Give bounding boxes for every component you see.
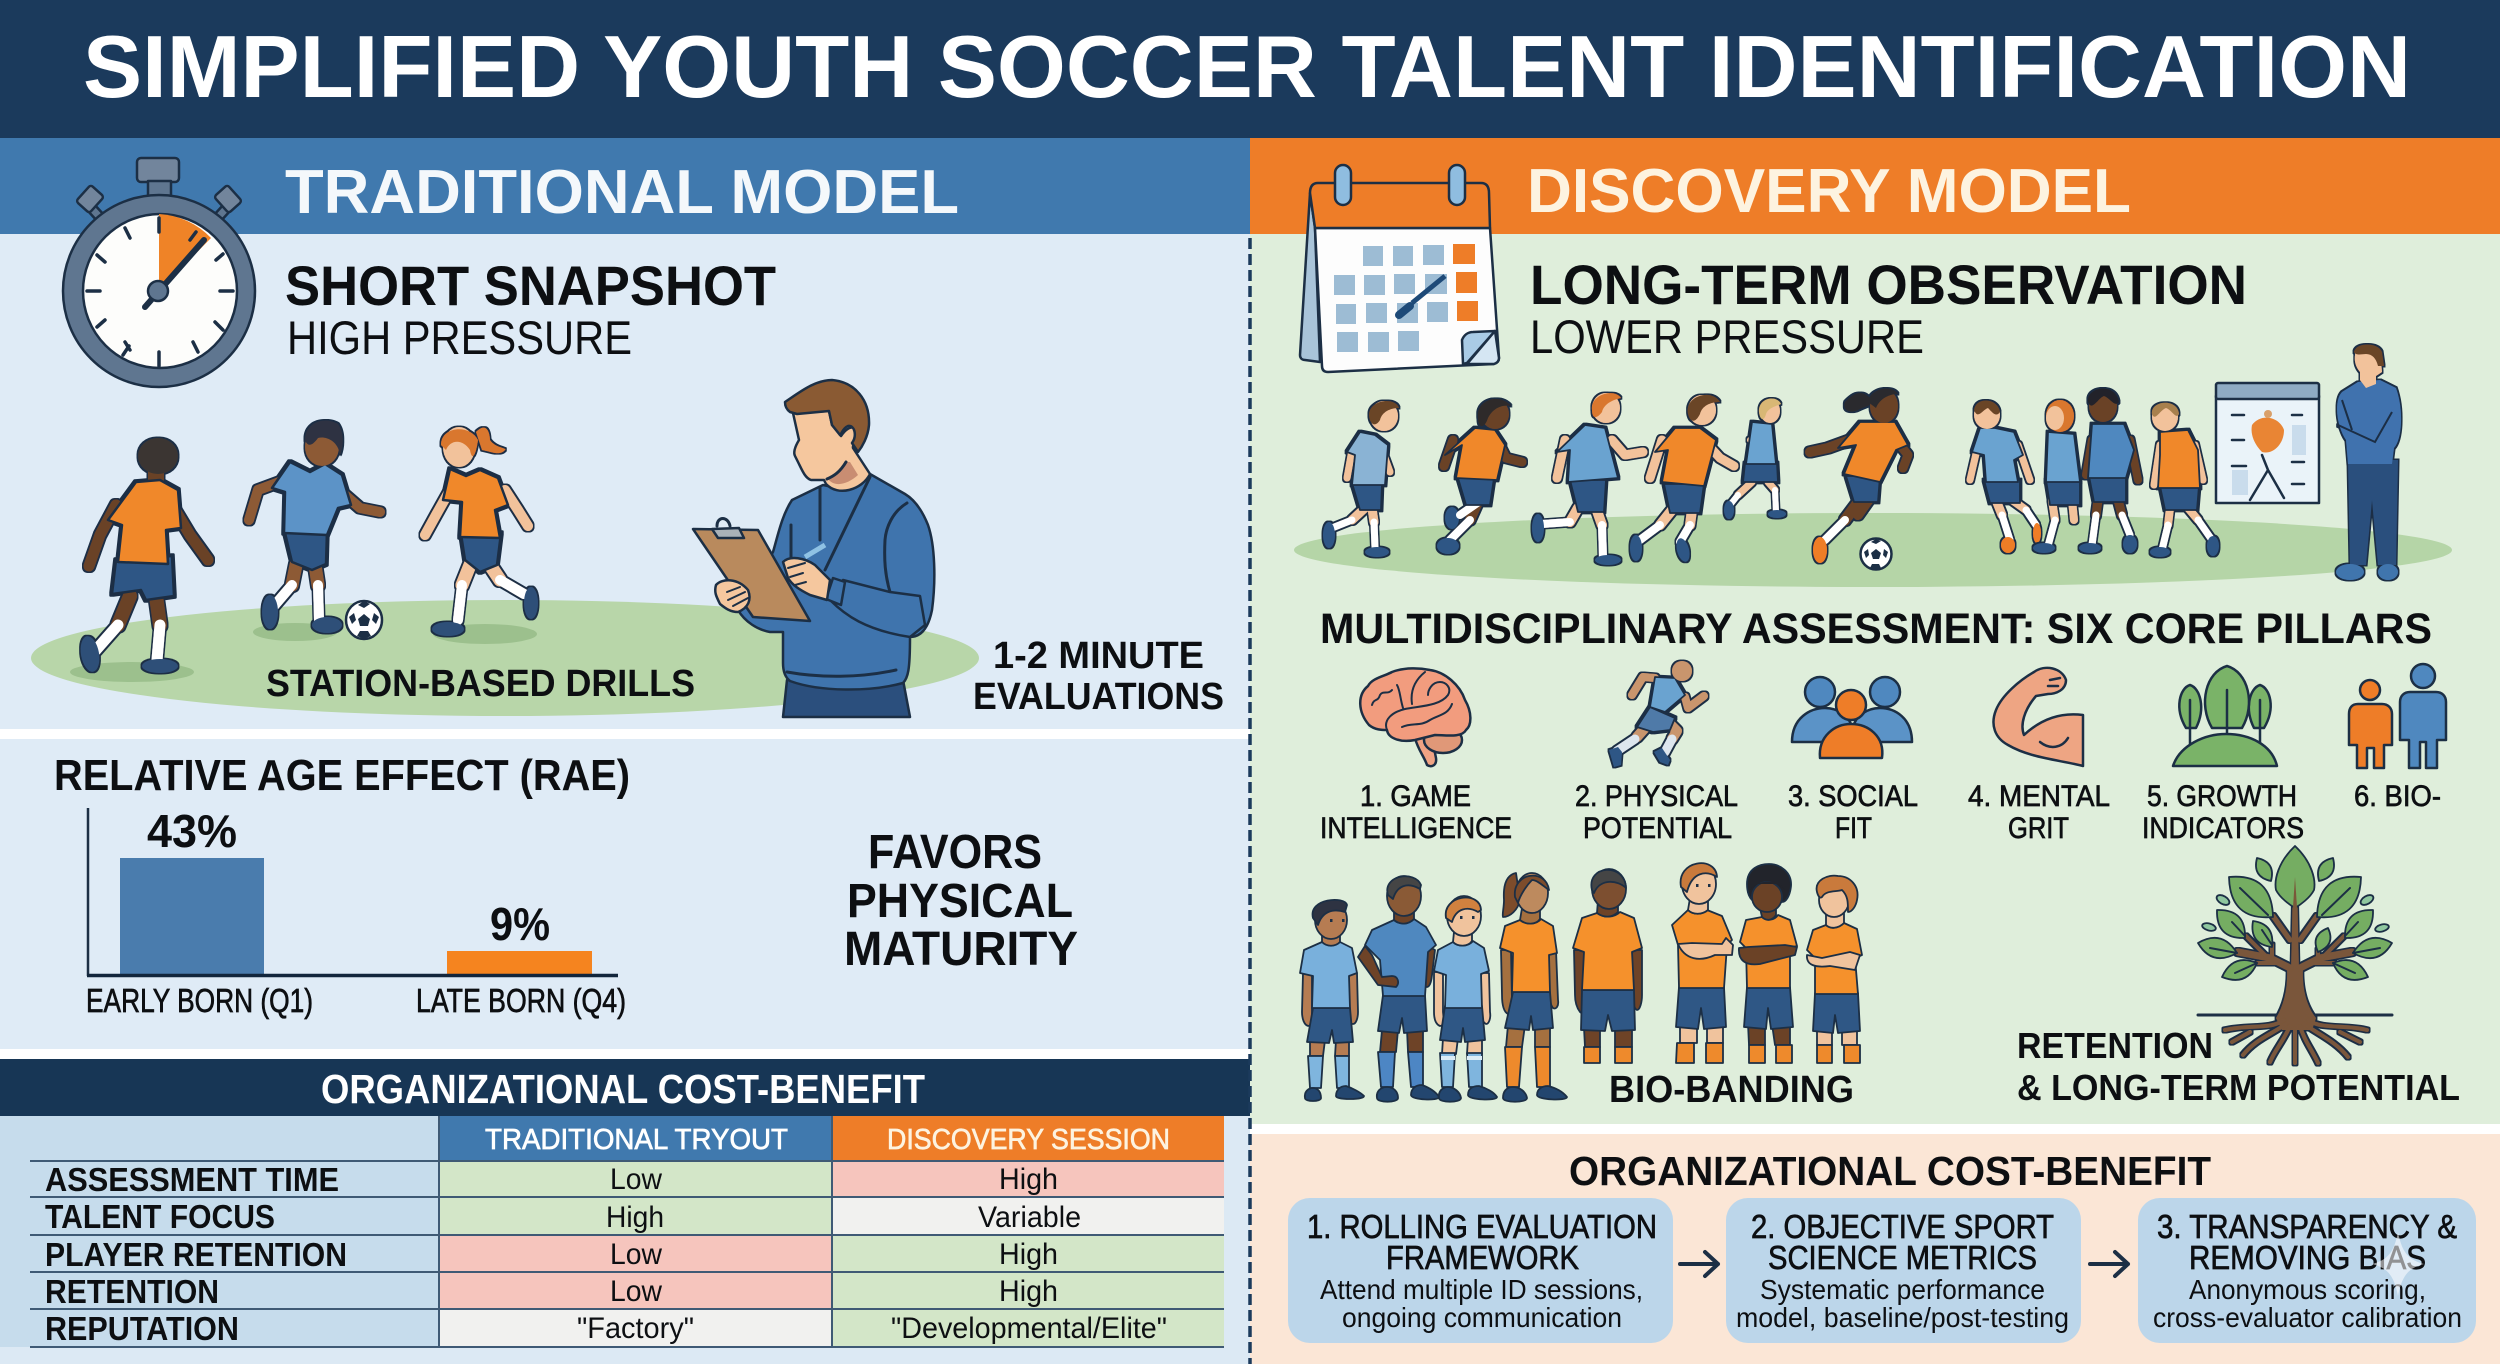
pillar 5: growth indicators: 5. GROWTH: [2147, 780, 2297, 813]
bar chart: early vs late born: 43%: [147, 805, 237, 857]
panel: discovery cost-benefit process: [1250, 1134, 2500, 1364]
caption: retention and long-term potential: RETENTION: [2017, 1025, 2213, 1066]
step card 3: transparency and removing bias: Anonymous scoring,: [2189, 1274, 2426, 1305]
table row labels: TALENT FOCUS: [45, 1198, 275, 1235]
table values: Low: [610, 1275, 662, 1308]
player 10: [2150, 403, 2219, 557]
step card 3: transparency and removing bias: cross-evaluator calibration: [2153, 1302, 2462, 1333]
player 8: [2033, 400, 2080, 553]
step card 1: rolling evaluation framework: [1288, 1198, 1673, 1343]
icon: runner: [1609, 661, 1704, 767]
figure: player in blue, dribbling: [249, 421, 380, 633]
bio-banding team illustration: [1300, 863, 1862, 1102]
caption: 1-2 minute evaluations: [973, 635, 1224, 718]
panel: traditional model overview: [0, 138, 1250, 729]
subheading: long-term observation, lower pressure: [1530, 253, 2247, 363]
pillar 3: social fit: FIT: [1835, 812, 1872, 845]
subheading: short snapshot, high pressure: SHORT SNAPSHOT: [285, 254, 776, 317]
step card 3: transparency and removing bias: 3. TRANSPARENCY &: [2157, 1208, 2457, 1245]
subheading: long-term observation, lower pressure: LONG-TERM OBSERVATION: [1530, 253, 2247, 316]
icon: sparkle: [2372, 1232, 2424, 1296]
pitch ellipse: [31, 600, 979, 716]
step card 1: rolling evaluation framework: FRAMEWORK: [1386, 1239, 1579, 1276]
pillar 4: mental grit: 4. MENTAL: [1968, 780, 2110, 813]
player 2: [1437, 399, 1522, 554]
arrow: step 2 to 3: [2090, 1252, 2128, 1276]
table row labels: PLAYER RETENTION: [45, 1236, 347, 1273]
step card 2: objective sport science metrics: [1726, 1198, 2081, 1343]
icon: trees on hill: [2173, 666, 2277, 766]
player shadows: [70, 623, 537, 682]
player 9: [2079, 388, 2138, 553]
table values: "Factory": [577, 1312, 694, 1345]
figure: coach with arms crossed: [2336, 344, 2401, 580]
icon: ball: [1860, 538, 1892, 570]
bar chart: early vs late born: [86, 805, 626, 1019]
pillar 1: game intelligence: 1. GAME: [1360, 780, 1471, 813]
fig b4: [1500, 873, 1567, 1102]
panel: discovery model overview: [1250, 138, 2500, 1124]
step card 2: objective sport science metrics: Systematic performance: [1760, 1274, 2045, 1305]
step card 3: transparency and removing bias: [2138, 1198, 2476, 1343]
table cells: [30, 1116, 1224, 1347]
heading band: discovery model: DISCOVERY MODEL: [1527, 157, 2131, 226]
table values: High: [999, 1275, 1058, 1308]
heading: six core pillars: MULTIDISCIPLINARY ASSESSMENT: SIX CORE PILLARS: [1320, 605, 2432, 653]
pillar 5: growth indicators: INDICATORS: [2142, 812, 2304, 845]
group of players with tactics board and coach: [1970, 344, 2401, 580]
callout: favors physical maturity: FAVORS: [868, 826, 1042, 879]
fig b8: [1807, 876, 1862, 1063]
icon: tactics board: [2216, 383, 2319, 503]
table row labels: ASSESSMENT TIME: [45, 1161, 339, 1198]
fig b7: [1739, 864, 1797, 1063]
pillar 3: social fit: [1788, 677, 1918, 845]
table column headers: DISCOVERY SESSION: [887, 1124, 1170, 1156]
table values: Low: [610, 1163, 662, 1196]
player 5: [1724, 398, 1786, 519]
pillar 4: mental grit: [1968, 668, 2110, 845]
pillar 2: physical potential: 2. PHYSICAL: [1575, 780, 1738, 813]
table values: Low: [610, 1238, 662, 1271]
caption: 1-2 minute evaluations: EVALUATIONS: [973, 676, 1224, 718]
step card 2: objective sport science metrics: SCIENCE METRICS: [1768, 1239, 2037, 1276]
table heading: [0, 1059, 1250, 1116]
heading: relative age effect: RELATIVE AGE EFFECT (RAE): [54, 751, 630, 800]
step card 3: transparency and removing bias: REMOVING BIAS: [2189, 1239, 2426, 1276]
icon: stopwatch: [63, 158, 255, 387]
table values: Variable: [978, 1201, 1081, 1234]
pillar 1: game intelligence: INTELLIGENCE: [1320, 812, 1512, 845]
fig b2: [1358, 876, 1439, 1102]
pitch ellipse: [1294, 513, 2452, 587]
table row labels: REPUTATION: [45, 1310, 239, 1347]
pillar 5: growth indicators: [2142, 666, 2304, 845]
icon: calendar: [1300, 165, 1499, 372]
table values: High: [999, 1238, 1058, 1271]
player 1: [1323, 401, 1399, 557]
player 6: [1810, 388, 1908, 563]
caption: bio-banding: BIO-BANDING: [1609, 1069, 1854, 1111]
step card 2: objective sport science metrics: 2. OBJECTIVE SPORT: [1751, 1208, 2054, 1245]
table column headers: [439, 1116, 1224, 1161]
step card 1: rolling evaluation framework: ongoing communication: [1342, 1302, 1622, 1333]
pillar 6: bio-banding: [2349, 664, 2446, 813]
fig b6: [1672, 863, 1733, 1063]
fig b1: [1300, 900, 1364, 1101]
table values: High: [606, 1201, 664, 1234]
heading band: traditional model: TRADITIONAL MODEL: [285, 158, 959, 227]
table values: "Developmental/Elite": [891, 1312, 1167, 1345]
bar chart: early vs late born: EARLY BORN (Q1): [86, 982, 313, 1019]
icon: soccer ball: [346, 601, 382, 639]
step card 1: rolling evaluation framework: Attend multiple ID sessions,: [1320, 1274, 1643, 1305]
pillar 3: social fit: 3. SOCIAL: [1788, 780, 1918, 813]
caption: retention and long-term potential: [2017, 1025, 2460, 1108]
pillar 6: bio-banding: 6. BIO-: [2354, 780, 2441, 813]
fig b3: [1434, 896, 1497, 1102]
icon: growing tree with roots: [2198, 846, 2392, 1063]
panel: organizational cost-benefit table: [0, 1059, 1250, 1364]
title banner: [0, 0, 2500, 138]
subheading: short snapshot, high pressure: HIGH PRESSURE: [287, 311, 632, 364]
player 3: [1532, 393, 1643, 565]
callout: favors physical maturity: PHYSICAL: [847, 875, 1073, 928]
fig b5: [1573, 869, 1642, 1063]
figure: player in orange, walking: [78, 438, 208, 673]
table values: [577, 1163, 1167, 1345]
heading band: discovery model: [1250, 138, 2500, 234]
step card 2: objective sport science metrics: model, baseline/post-testing: [1736, 1302, 2069, 1333]
subheading: short snapshot, high pressure: [285, 254, 776, 364]
figure: player in orange with ponytail: [425, 427, 538, 636]
caption: retention and long-term potential: & LONG-TERM POTENTIAL: [2017, 1067, 2460, 1108]
icon: brain: [1360, 668, 1470, 766]
title banner: SIMPLIFIED YOUTH SOCCER TALENT IDENTIFICATION: [83, 17, 2411, 116]
pillar 4: mental grit: GRIT: [2008, 812, 2069, 845]
icon: flexed arm: [1993, 668, 2083, 766]
panel: relative age effect: [0, 739, 1250, 1049]
pillar 1: game intelligence: [1320, 668, 1512, 845]
figure: coach with clipboard: [693, 380, 934, 717]
callout: favors physical maturity: [844, 826, 1078, 976]
table values: High: [999, 1163, 1058, 1196]
heading: organizational cost-benefit: ORGANIZATIONAL COST-BENEFIT: [1569, 1148, 2211, 1194]
step card 1: rolling evaluation framework: 1. ROLLING EVALUATION: [1307, 1208, 1657, 1245]
player 4: [1630, 395, 1734, 563]
table heading: ORGANIZATIONAL COST-BENEFIT: [321, 1066, 925, 1112]
bar chart: early vs late born: 9%: [490, 898, 550, 950]
table row labels: [45, 1161, 347, 1347]
pillar 2: physical potential: POTENTIAL: [1583, 812, 1732, 845]
player 7: [1970, 400, 2041, 553]
subheading: long-term observation, lower pressure: LOWER PRESSURE: [1530, 310, 1924, 363]
icon: three people: [1792, 677, 1912, 758]
callout: favors physical maturity: MATURITY: [844, 923, 1078, 976]
heading band: traditional model: [0, 138, 1250, 234]
caption: station-based drills: STATION-BASED DRILLS: [266, 663, 695, 705]
table column headers: TRADITIONAL TRYOUT: [485, 1124, 788, 1156]
pillar 2: physical potential: [1575, 661, 1738, 845]
group of players in drills: [1323, 388, 1908, 570]
icon: child and adult figures: [2349, 664, 2446, 768]
bar chart: early vs late born: LATE BORN (Q4): [416, 982, 626, 1019]
table row labels: RETENTION: [45, 1273, 219, 1310]
caption: 1-2 minute evaluations: 1-2 MINUTE: [993, 635, 1204, 677]
arrow: step 1 to 2: [1680, 1252, 1718, 1276]
